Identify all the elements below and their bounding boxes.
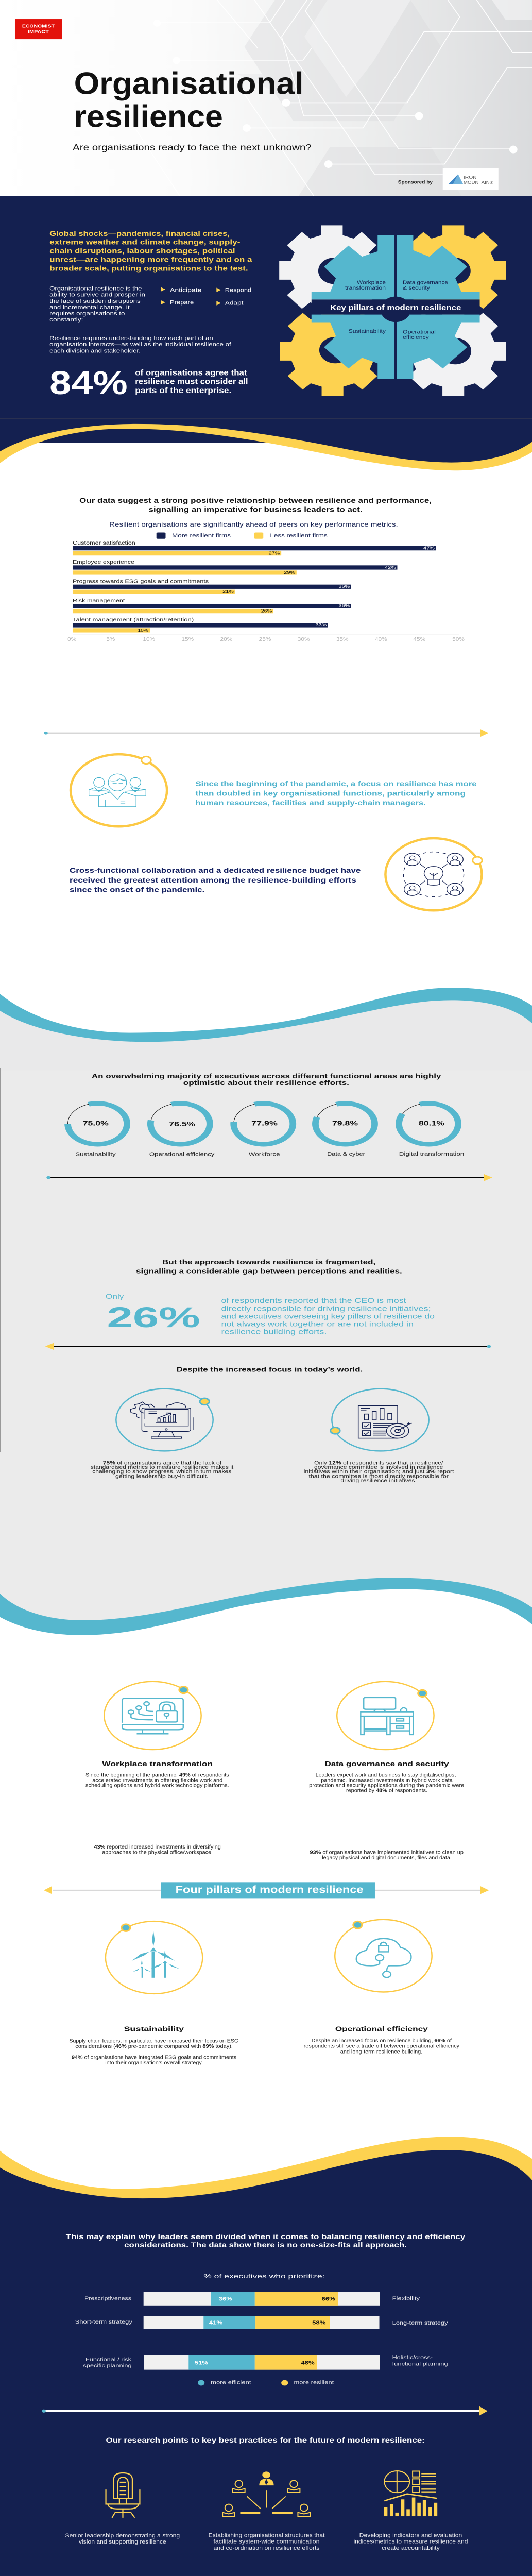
practice text: indicators: create accountability — [382, 2545, 440, 2551]
logo: Economist Impact: IMPACT — [28, 29, 49, 35]
practice text: leadership — [65, 2533, 180, 2545]
intro statement — [49, 230, 252, 273]
pillars section: workplace and data: scheduling options and hybrid work technology platforms. — [85, 1782, 229, 1788]
bar: functional vs holistic: functional planning — [392, 2361, 448, 2367]
definition text: requires organisations to — [49, 311, 125, 317]
icon: network of people — [222, 2471, 310, 2516]
bar chart: 29% — [284, 570, 295, 575]
bar chart: 15% — [181, 636, 194, 642]
pandemic findings section — [44, 729, 489, 910]
sustainability text: into their organisation’s overall strategy. — [105, 2060, 203, 2065]
bar chart: 27% — [269, 551, 280, 556]
bar chart: 40% — [375, 636, 387, 642]
bar: prescriptiveness vs flexibility: 66% — [322, 2296, 335, 2302]
bar: functional vs holistic: specific planning — [83, 2363, 132, 2368]
workplace second stat: 43% reported increased investments in diversifying — [94, 1844, 221, 1850]
stat description: resilience building efforts. — [221, 1328, 327, 1336]
intro statement: Global shocks—pandemics, financial crises, — [49, 230, 230, 238]
bar chart — [67, 539, 465, 642]
donut: operational efficiency 76.5%: Operational efficiency — [149, 1151, 215, 1157]
bar chart: 21% — [222, 589, 234, 594]
definition text: Organisational resilience is the — [49, 285, 142, 292]
resilience text: Resilience requires understanding how each part of an — [49, 335, 213, 342]
bar chart: 33% — [316, 623, 327, 628]
heading — [136, 1258, 402, 1275]
sustainability text: considerations (46% pre-pandemic compared with 89% today). — [75, 2043, 233, 2049]
gears diagram — [279, 225, 506, 396]
chart title: % of executives who prioritize: — [203, 2273, 324, 2280]
pillars section: sustainability and efficiency — [44, 1844, 489, 2065]
caption: governance committee: Only 12% of respondents say that a resilience/ — [314, 1460, 443, 1466]
gears diagram: Workplace — [357, 279, 386, 285]
best practices section — [42, 2354, 488, 2551]
practice text: structures: facilitate system-wide communication — [213, 2539, 320, 2545]
caption: standardised metrics: challenging to show progress, which in turn makes — [92, 1469, 231, 1475]
caption: governance committee — [304, 1460, 454, 1483]
caption: standardised metrics — [91, 1460, 233, 1479]
operational efficiency text: and long-term resilience building. — [340, 2048, 422, 2055]
bar chart: Risk management — [73, 597, 125, 603]
legend: more efficient — [211, 2379, 251, 2385]
donut: digital transformation 80.1% — [391, 1098, 466, 1157]
bar: functional vs holistic: 51% — [195, 2360, 208, 2366]
bar chart: 26% — [261, 608, 272, 614]
definition text — [49, 285, 145, 323]
bar chart: 36% — [338, 584, 350, 589]
workplace second stat: approaches to the physical office/workspace. — [102, 1850, 213, 1855]
stat description — [221, 1297, 435, 1336]
gears diagram: transformation — [345, 284, 386, 291]
practice text: structures — [209, 2533, 325, 2551]
bar chart: 35% — [336, 636, 349, 642]
definition text: constantly: — [49, 317, 83, 323]
legend — [198, 2379, 334, 2385]
heading: But the approach towards resilience is fragmented, — [162, 1258, 375, 1266]
bar: prescriptiveness vs flexibility: Prescriptiveness — [84, 2295, 131, 2301]
intro panel — [49, 225, 506, 401]
bar chart: Talent management (attraction/retention) — [73, 617, 194, 622]
bar chart: 50% — [452, 636, 465, 642]
resilience text: each division and stakeholder. — [49, 348, 141, 354]
best practices section: Senior leadership demonstrating a strong — [65, 2533, 180, 2539]
icon: executive chair — [106, 2473, 140, 2518]
bar: short-term vs long-term: 58% — [312, 2319, 325, 2326]
icon: collaboration network in circle — [385, 838, 482, 910]
stat: 84%: 84% — [49, 365, 128, 401]
bar chart: 10% — [143, 636, 155, 642]
caption: standardised metrics: getting leadership buy-in difficult. — [115, 1473, 209, 1479]
bar chart: 45% — [413, 636, 425, 642]
operational efficiency text — [304, 2025, 459, 2055]
sustainability text — [69, 2025, 238, 2065]
bar chart: 25% — [259, 636, 271, 642]
logo: Economist Impact — [15, 19, 62, 39]
text: focus on resilience — [195, 780, 477, 807]
donut: workforce 77.9% — [226, 1098, 300, 1157]
divided leaders section — [0, 2137, 532, 2576]
bar: functional vs holistic — [83, 2354, 448, 2370]
intro statement: broader scale, putting organisations to the test. — [49, 264, 248, 273]
intro statement: extreme weather and climate change, supply- — [49, 238, 240, 246]
donut: sustainability 75.0%: Sustainability — [75, 1151, 116, 1157]
bar: prescriptiveness vs flexibility — [84, 2292, 420, 2306]
workplace transformation text: Workplace transformation — [102, 1760, 213, 1768]
gears diagram: & security — [403, 284, 430, 291]
arrow — [46, 1174, 492, 1181]
legend: More resilient firms — [172, 533, 231, 539]
legend: more resilient — [294, 2379, 334, 2385]
heading — [66, 2233, 466, 2249]
workplace second stat — [94, 1844, 221, 1855]
donut: data and cyber 79.8% — [308, 1098, 382, 1157]
text: cross-functional collaboration — [70, 867, 361, 894]
bar chart: 36% — [338, 603, 350, 608]
sustainability text: 94% of organisations have integrated ESG goals and commitments — [72, 2054, 236, 2060]
stat: 26% — [106, 1293, 200, 1333]
bullet list — [161, 287, 251, 306]
intro panel: resilience must consider all — [135, 377, 248, 386]
header section — [0, 0, 532, 196]
heading — [92, 1073, 441, 1087]
donut: data and cyber 79.8%: Data & cyber — [327, 1151, 365, 1157]
icon: people in circle — [71, 754, 167, 826]
bullet list: Prepare — [170, 299, 194, 306]
workplace transformation text: accelerated investments in offering flexible work and — [92, 1777, 222, 1783]
stat: 26%: Only — [106, 1293, 124, 1301]
gears diagram: Data governance — [403, 279, 448, 285]
workplace transformation text: Since the beginning of the pandemic, 49% of respondents — [85, 1772, 229, 1778]
donut: data and cyber 79.8%: 79.8% — [332, 1120, 358, 1127]
donut: operational efficiency 76.5%: 76.5% — [169, 1121, 195, 1128]
bar chart: 20% — [220, 636, 232, 642]
sustainability text: Sustainability — [124, 2025, 184, 2032]
title: resilience — [74, 99, 223, 133]
gears diagram: Operational — [403, 329, 436, 335]
bar chart: 42% — [385, 565, 396, 570]
arrow — [42, 2406, 488, 2416]
practice text: leadership: vision and supporting resilience — [79, 2539, 166, 2545]
icon: desk in circle — [337, 1682, 434, 1750]
donut: sustainability 75.0%: 75.0% — [83, 1120, 109, 1127]
legend — [157, 533, 328, 539]
workplace transformation text — [85, 1760, 229, 1788]
bar chart: 30% — [298, 636, 310, 642]
bar: functional vs holistic: Functional / risk — [85, 2356, 132, 2362]
icon: wind turbines in circle — [106, 1921, 202, 1994]
donut: workforce 77.9%: Workforce — [249, 1151, 280, 1157]
legend: Less resilient firms — [270, 533, 328, 539]
bar chart: Customer satisfaction — [73, 539, 135, 546]
practice text: structures: and co-ordination on resilience efforts — [213, 2545, 320, 2551]
optimism section — [46, 1073, 492, 1181]
text: cross-functional collaboration: since the onset of the pandemic. — [70, 886, 204, 894]
logo: Economist Impact: ECONOMIST — [22, 24, 55, 29]
intro statement: chain disruptions, labour shortages, political — [49, 247, 235, 255]
bar: short-term vs long-term: Short-term strategy — [75, 2319, 133, 2325]
donut: workforce 77.9%: 77.9% — [251, 1120, 278, 1127]
intro statement: unrest—are happening more frequently and on a — [49, 256, 252, 264]
sponsor — [398, 168, 499, 190]
bar chart: Progress towards ESG goals and commitments — [73, 578, 209, 584]
pillars section: workplace and data — [0, 1578, 532, 1793]
pillars section: sustainability and efficiency: Supply-chain leaders, in particular, have increased their focus on ESG — [69, 2038, 238, 2044]
heading: optimistic about their resilience efforts. — [183, 1079, 349, 1087]
icon: report and target in circle — [331, 1389, 429, 1451]
data second stat — [310, 1850, 464, 1860]
bar chart: 10% — [138, 628, 148, 633]
resilience text: organisation interacts—as well as the individual resilience of — [49, 342, 231, 348]
title — [74, 66, 304, 133]
operational efficiency text: Operational efficiency — [335, 2025, 428, 2032]
performance section — [0, 418, 532, 642]
bullet list: Anticipate — [170, 287, 201, 293]
sponsor: Sponsored by — [398, 179, 433, 185]
donut: sustainability 75.0% — [60, 1098, 134, 1157]
bar: prescriptiveness vs flexibility: 36% — [219, 2296, 232, 2302]
caption: standardised metrics: 75% of organisations agree that the lack of — [103, 1460, 221, 1466]
teal wave into grey section — [0, 988, 532, 1075]
bar: functional vs holistic: 48% — [301, 2360, 315, 2366]
bar: functional vs holistic: Holistic/cross- — [392, 2354, 433, 2360]
banner: four pillars — [44, 1882, 489, 1898]
arrow — [45, 1343, 491, 1350]
best practices section: Establishing organisational structures that — [209, 2533, 325, 2538]
icon: monitor with lock in circle — [104, 1682, 201, 1750]
arrow — [44, 729, 489, 737]
bar chart: 5% — [106, 636, 115, 642]
bar: prescriptiveness vs flexibility: Flexibility — [392, 2295, 420, 2301]
bar: short-term vs long-term: 41% — [209, 2319, 222, 2326]
intro panel: of organisations agree that — [135, 368, 247, 378]
fragmented approach section — [45, 1258, 491, 1483]
icon: monitor dashboard in circle — [116, 1389, 213, 1451]
bullet list: Adapt — [225, 300, 244, 306]
donut: digital transformation 80.1%: Digital transformation — [399, 1150, 464, 1157]
bar chart: Employee experience — [73, 559, 134, 565]
icon: cloud lock in circle — [335, 1920, 432, 1992]
caption: standardised metrics: standardised metrics to measure resilience makes it — [91, 1464, 233, 1470]
definition text: the face of sudden disruptions — [49, 298, 141, 304]
bar chart: 47% — [423, 546, 435, 551]
icon: metrics and charts — [384, 2471, 437, 2516]
intro panel: Respond — [225, 287, 251, 293]
bar: short-term vs long-term: Long-term strategy — [392, 2320, 448, 2326]
definition text: ability to survive and prosper in — [49, 292, 145, 298]
navy intro panel background — [0, 196, 532, 443]
gears diagram: Sustainability — [349, 328, 386, 334]
sponsor: IRON — [464, 175, 477, 180]
resilience text — [49, 335, 231, 354]
caption: governance committee: initiatives within their organisation; and just 3% report — [304, 1469, 454, 1475]
stat: 26%: 26% — [107, 1301, 200, 1333]
caption: governance committee: driving resilience initiatives. — [340, 1478, 417, 1483]
stat: 84%: parts of the enterprise. — [135, 386, 231, 395]
heading — [79, 497, 432, 514]
practice text: indicators — [353, 2533, 468, 2551]
sponsor: MOUNTAIN® — [464, 180, 493, 185]
gears diagram: efficiency — [403, 334, 429, 340]
bar chart: 0% — [67, 636, 76, 642]
heading: despite: Despite the increased focus in today’s world. — [177, 1365, 363, 1373]
definition text: and incremental change. It — [49, 304, 130, 311]
donut: operational efficiency 76.5% — [143, 1098, 217, 1157]
data governance text — [309, 1760, 464, 1793]
donut: digital transformation 80.1%: 80.1% — [419, 1120, 444, 1127]
bar: short-term vs long-term — [75, 2316, 448, 2329]
data governance text: reported by 48% of respondents. — [346, 1787, 427, 1793]
